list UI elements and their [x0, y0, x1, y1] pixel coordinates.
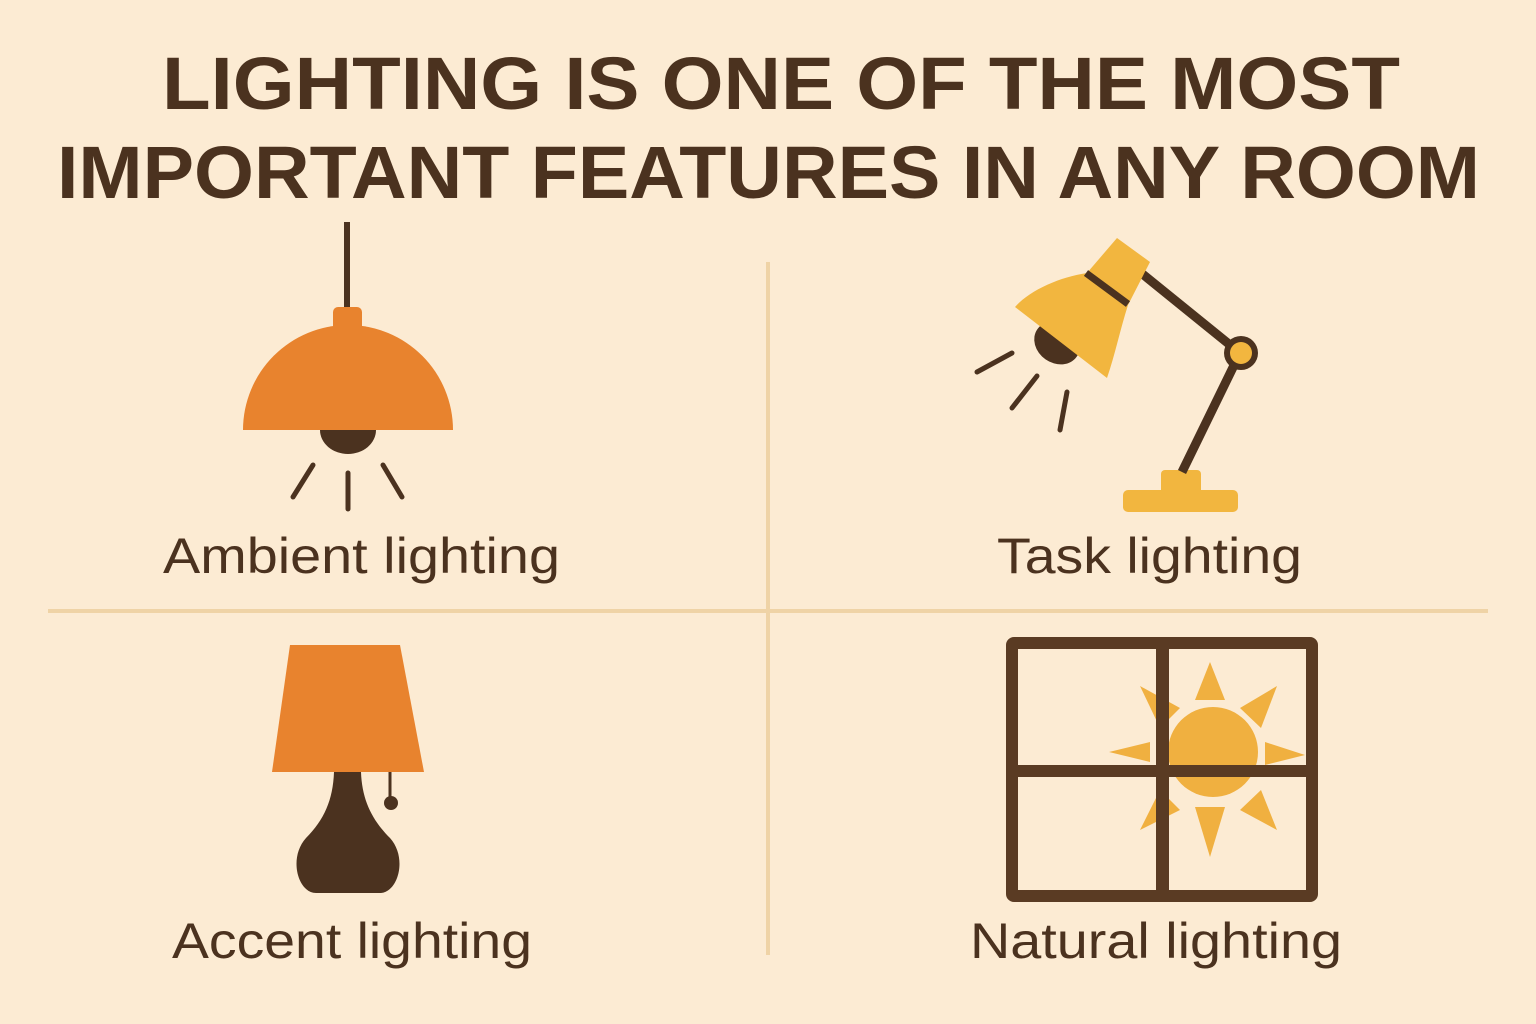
panel: task lighting — [977, 238, 1302, 584]
title — [57, 42, 1480, 214]
title: LIGHTING IS ONE OF THE MOST — [162, 42, 1400, 125]
icon: pendant lamp — [243, 222, 453, 509]
icon: window with sun — [1012, 643, 1312, 896]
icon: desk lamp — [977, 238, 1258, 512]
icon: table lamp — [272, 645, 424, 893]
label: natural: Natural lighting — [970, 913, 1342, 969]
panel: ambient lighting — [163, 222, 560, 584]
title: IMPORTANT FEATURES IN ANY ROOM — [57, 131, 1480, 214]
label: task: Task lighting — [997, 528, 1302, 584]
label: accent: Accent lighting — [172, 913, 532, 969]
panel: accent lighting — [172, 645, 532, 969]
panel: natural lighting — [970, 643, 1342, 969]
label: ambient: Ambient lighting — [163, 528, 560, 584]
